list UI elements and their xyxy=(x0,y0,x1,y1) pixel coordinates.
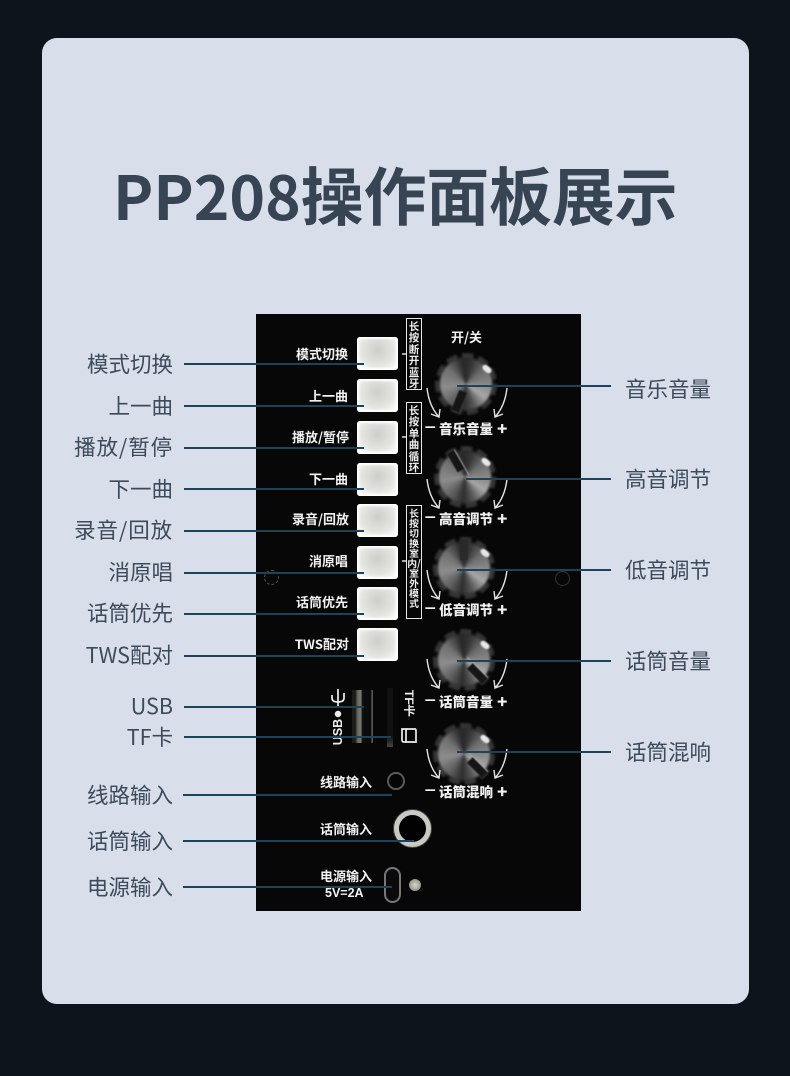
power label: 电源输入 xyxy=(320,866,372,885)
screw right xyxy=(555,571,570,586)
callout: mic reverb: 话筒混响 xyxy=(625,736,711,767)
panel: device control panel photo: TWS配对 xyxy=(295,634,349,653)
power label: 开/关 xyxy=(451,327,482,346)
panel: device control panel photo: 上一曲 xyxy=(309,386,348,405)
line in label: 线路输入 xyxy=(320,772,372,791)
callout: music volume: 音乐音量 xyxy=(625,373,711,404)
title: PP208操作面板展示 xyxy=(113,148,678,239)
mic jack xyxy=(394,810,431,847)
button: mode switch xyxy=(296,337,398,370)
callout: mic priority: 话筒优先 xyxy=(87,597,173,628)
callout: record playback: 录音/回放 xyxy=(74,514,173,545)
button: play pause xyxy=(292,421,398,454)
callout: bass: 低音调节 xyxy=(625,554,711,585)
USB-C port xyxy=(384,867,401,903)
panel: device control panel photo: 播放/暂停 xyxy=(292,427,349,446)
panel: device control panel photo: 消原唱 xyxy=(309,551,348,570)
note: long press loop: 长按单曲循环 xyxy=(409,403,419,475)
callout: treble: 高音调节 xyxy=(625,463,711,494)
callout: mic volume: 话筒音量 xyxy=(625,645,711,676)
callout: line in: 线路输入 xyxy=(87,779,173,810)
button: TWS pairing xyxy=(295,628,398,661)
callout: vocal removal: 消原唱 xyxy=(108,556,173,587)
button: next xyxy=(309,463,398,496)
knob label: mic reverb: 话筒混响 xyxy=(439,781,493,801)
callout: mode switch: 模式切换 xyxy=(87,348,173,379)
button: record playback xyxy=(292,504,398,537)
callout: previous: 上一曲 xyxy=(108,390,173,421)
callout: play pause: 播放/暂停 xyxy=(74,431,173,462)
knob label: music volume: 音乐音量 xyxy=(439,418,493,438)
icon: USB label and symbol xyxy=(331,689,345,745)
panel: device control panel photo xyxy=(256,314,581,911)
power LED xyxy=(409,879,421,891)
line in jack xyxy=(387,772,405,790)
mic in label: 话筒输入 xyxy=(320,819,372,838)
knob label: music volume: 一 xyxy=(425,420,436,435)
knob label: treble: 高音调节 xyxy=(439,508,493,528)
knob label: mic volume: + xyxy=(497,688,507,713)
knob label: mic volume: 一 xyxy=(425,693,436,708)
icon: USB label and symbol: USB xyxy=(331,719,345,745)
knob label: mic volume: 话筒音量 xyxy=(439,691,493,711)
knob label: mic volume xyxy=(425,688,507,713)
note: long press loop xyxy=(406,402,422,474)
knob: mic reverb xyxy=(432,722,496,786)
knob label: music volume xyxy=(425,415,507,440)
knob label: mic reverb xyxy=(425,778,507,803)
TF card slot xyxy=(387,688,393,747)
knob label: mic reverb: 一 xyxy=(425,783,436,798)
icon: SD card xyxy=(401,728,417,743)
button: previous xyxy=(309,379,398,412)
arrows around knobs xyxy=(402,353,508,779)
knob label: bass: 低音调节 xyxy=(439,599,493,619)
knob label: bass xyxy=(425,596,507,621)
screw left xyxy=(264,570,279,585)
knob: music volume xyxy=(434,352,498,416)
callout: TWS pairing: TWS配对 xyxy=(86,639,173,670)
panel: device control panel photo: 话筒优先 xyxy=(296,592,348,611)
knob: bass xyxy=(432,536,496,600)
note: long press bluetooth: 长按断开蓝牙 xyxy=(409,319,419,391)
knob label: music volume: + xyxy=(497,415,507,440)
knob label: mic reverb: + xyxy=(497,778,507,803)
note: long press bluetooth xyxy=(406,318,422,390)
USB port xyxy=(352,690,373,743)
callout: mic in: 话筒输入 xyxy=(87,825,173,856)
button: mic priority xyxy=(296,587,398,620)
button: vocal removal xyxy=(309,546,398,579)
panel: device control panel photo: 模式切换 xyxy=(296,344,348,363)
voltage label: 5V=2A xyxy=(325,886,364,900)
knob label: bass: + xyxy=(497,596,507,621)
callout: next: 下一曲 xyxy=(108,473,173,504)
callout: power in: 电源输入 xyxy=(87,871,173,902)
knob label: bass: 一 xyxy=(425,601,436,616)
knob: treble xyxy=(433,445,496,509)
callout: USB: USB xyxy=(131,690,173,721)
TF card label: TF卡 xyxy=(402,690,416,717)
knob label: treble: 一 xyxy=(425,510,436,525)
panel: device control panel photo: 录音/回放 xyxy=(292,509,349,528)
knob label: treble: + xyxy=(497,505,507,530)
knob: mic volume xyxy=(432,628,496,692)
note: long press indoor outdoor: 长按切换室内/室外模式 xyxy=(407,506,421,610)
panel: device control panel photo: 下一曲 xyxy=(309,469,348,488)
callout: TF card: TF卡 xyxy=(127,721,173,752)
knob label: treble xyxy=(425,505,507,530)
